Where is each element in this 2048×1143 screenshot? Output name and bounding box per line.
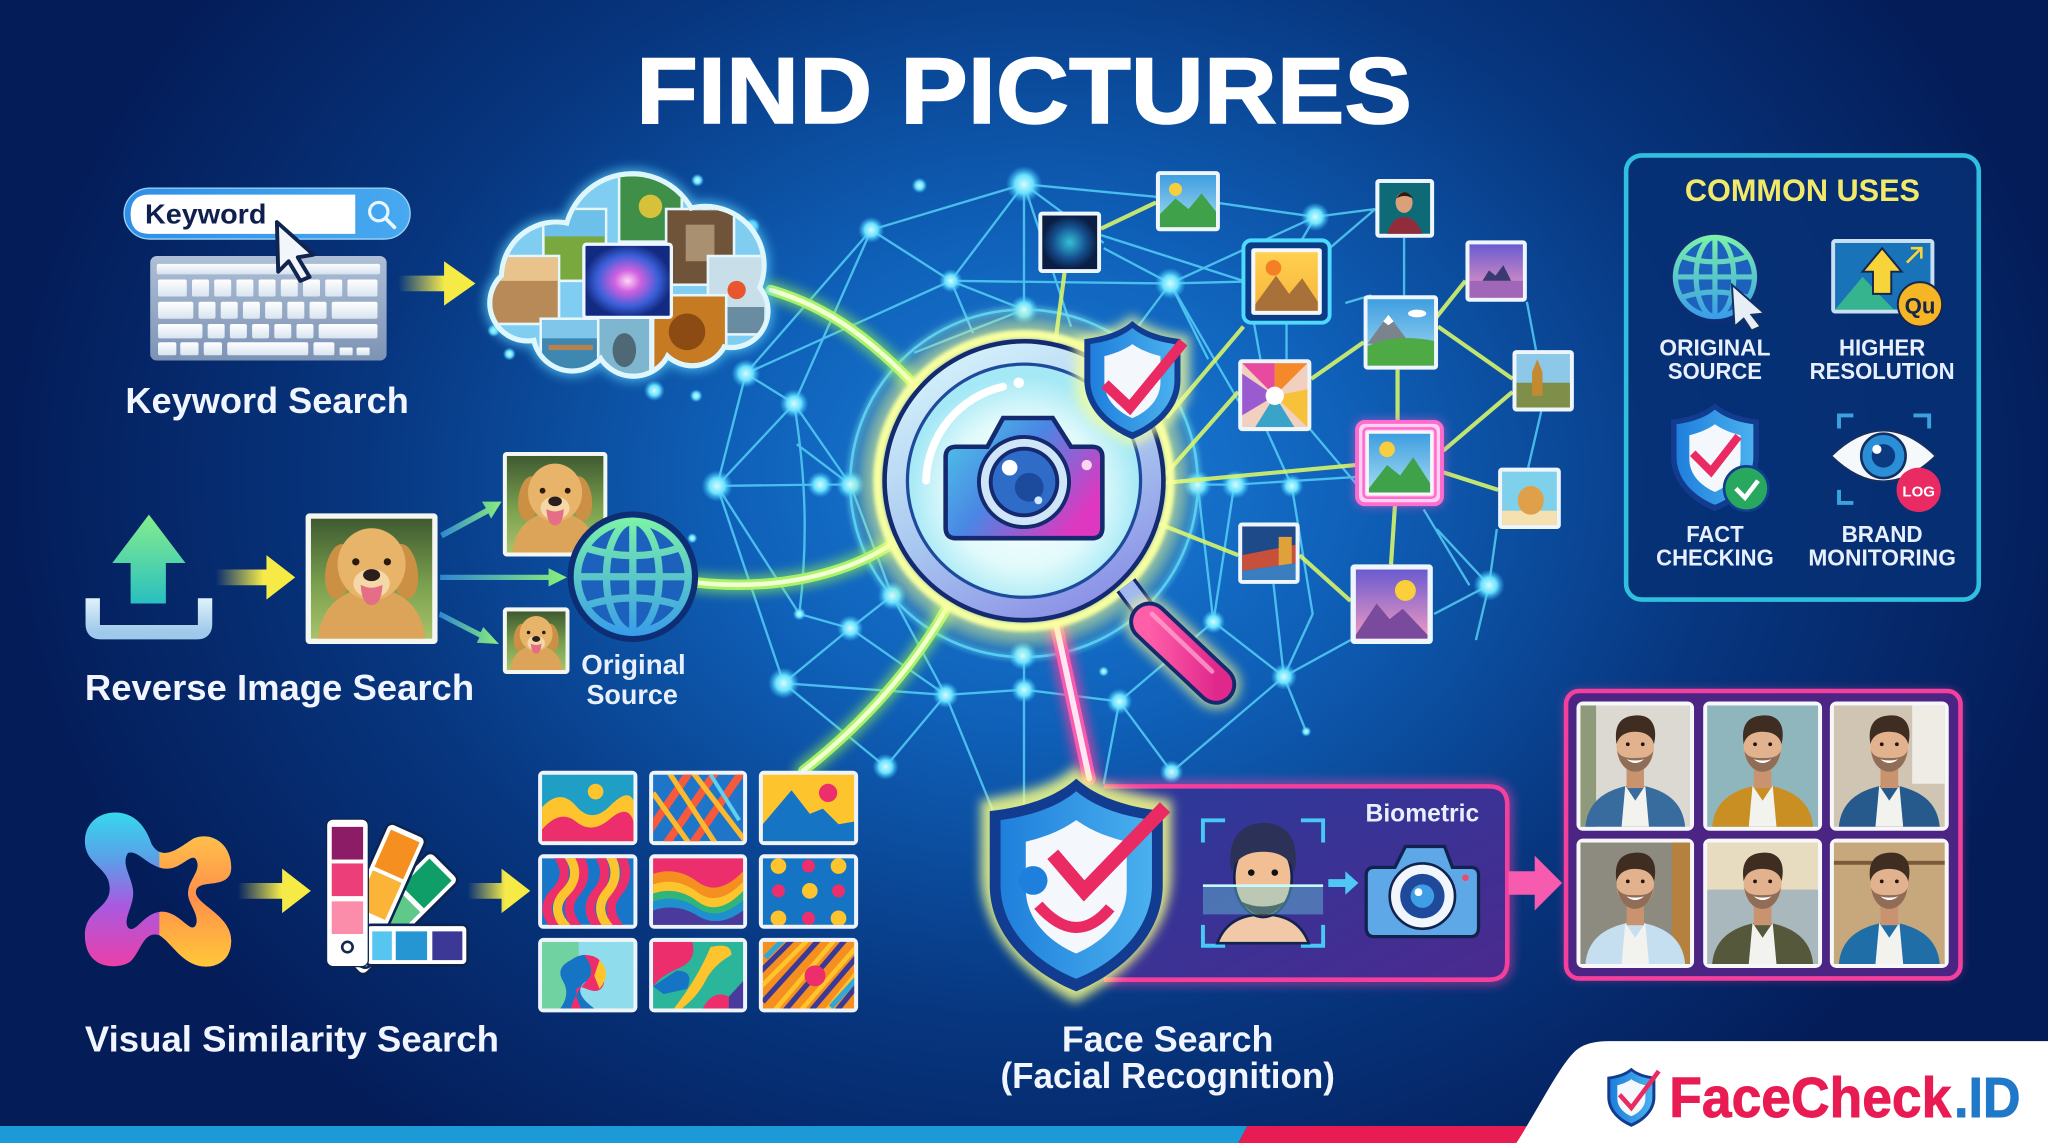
thumb: dusk small [1465,240,1527,302]
use: original source: SOURCE [1668,358,1762,384]
logo: FaceCheck.ID [1516,1041,2048,1143]
icon: colour swatch fan [327,819,468,977]
use: higher resolution: Qu [1905,294,1935,319]
label: Original Source [581,649,686,710]
arrow [238,869,311,913]
use: higher resolution [1810,239,1955,384]
photo panel [1566,691,1960,978]
use: brand monitoring: BRAND [1842,521,1923,547]
photo 2 [1703,701,1822,831]
photo 6 [1830,839,1949,968]
label: Original Source: Source [586,679,678,710]
network mesh [487,166,1541,836]
use: fact checking: FACT [1686,521,1744,547]
result tiles [538,768,861,1015]
photo: dog bottom [503,607,569,674]
use: brand monitoring [1808,415,1956,571]
icon: keyboard [150,256,387,361]
use: fact checking [1656,403,1774,571]
thumb: beach [1498,468,1561,529]
thumbnail links [1055,202,1512,601]
icon: globe [568,511,698,642]
arrow [216,555,295,600]
use: higher resolution: HIGHER [1839,334,1926,360]
tile 3 [759,771,858,845]
icon: search bar: Keyword [145,198,266,229]
icon: camera [946,418,1102,538]
panel: common uses [1626,155,1979,600]
tile 6 [759,854,858,929]
tile 4 [538,852,637,931]
icon: search bar [124,188,410,239]
icon: image cloud [483,169,777,385]
thumb: colour burst [1238,359,1311,431]
thumb: mountain small [1156,171,1220,231]
tile 9 [756,935,861,1015]
photo 3 [1830,701,1949,831]
logo wordmark: FaceCheck [1669,1066,1952,1129]
photo: dog main [306,513,438,644]
label: Biometric: Biometric [1366,801,1479,828]
photo 5 [1703,839,1822,968]
section: visual similarity search [85,768,861,1060]
section: face search [986,691,1960,1096]
thumb: cyan frame mountain [1243,240,1330,323]
section: keyword search [124,169,777,421]
tile 2 [647,768,747,848]
icon: colour blob [85,813,231,967]
thumb: portrait [1375,179,1434,238]
central magnifier [875,320,1216,684]
image thumbnails cluster [1038,171,1574,644]
magnifier handle [1126,585,1216,684]
use: brand monitoring: MONITORING [1808,545,1956,571]
arrows: to results [439,502,567,644]
logo wordmark: .ID [1954,1066,2021,1129]
icon: large shield [986,773,1166,997]
tile 7 [538,938,637,1012]
icon: cursor [277,222,313,281]
use: original source: ORIGINAL [1659,334,1770,360]
label: Face Search: (Facial Recognition) [1000,1055,1335,1096]
thumb: space [1038,212,1101,273]
label: Original Source: Original [581,649,686,680]
panel: biometric pipeline [1104,786,1507,980]
section: reverse image search [85,452,698,710]
arrow [398,261,475,306]
label: Reverse Image Search: Reverse Image Search [85,667,474,708]
magnifier glow [875,332,1173,630]
tile 5 [649,854,747,929]
logo shield [1607,1068,1659,1127]
icon: shield with check [1079,320,1186,442]
icon: biometric camera [1366,846,1479,937]
thumb: green hills [1364,295,1438,370]
label: Keyword Search: Keyword Search [125,380,409,421]
use: brand monitoring: LOG [1902,483,1935,500]
use: original source [1659,230,1770,384]
heading: common uses: COMMON USES [1685,173,1920,208]
photo 1 [1576,701,1694,831]
label: Face Search: Face Search [1062,1019,1273,1060]
icon: scanned face [1203,820,1323,946]
label: Visual Similarity Search: Visual Similarity Search [85,1019,499,1060]
use: fact checking: CHECKING [1656,545,1774,571]
thumb: purple mountain [1351,564,1433,644]
photo: dog top [503,452,607,556]
title: FIND PICTURES [636,38,1412,143]
magnifier lens [882,339,1166,622]
label: Face Search [1000,1019,1335,1096]
thumb: landmark [1512,350,1574,411]
thumb: dark colourful [1238,523,1300,584]
tile 1 [538,771,637,845]
thumb: pink frame highlighted [1356,421,1443,506]
arrow: face to camera [1328,871,1358,895]
neon connector curves [697,290,1089,779]
photo 4 [1576,839,1694,968]
bottom colour bar [0,1126,1535,1143]
tile 8 [649,938,747,1012]
arrow [468,869,530,913]
arrow: pink [1509,856,1562,910]
use: higher resolution: RESOLUTION [1810,358,1955,384]
icon: upload [93,515,205,632]
